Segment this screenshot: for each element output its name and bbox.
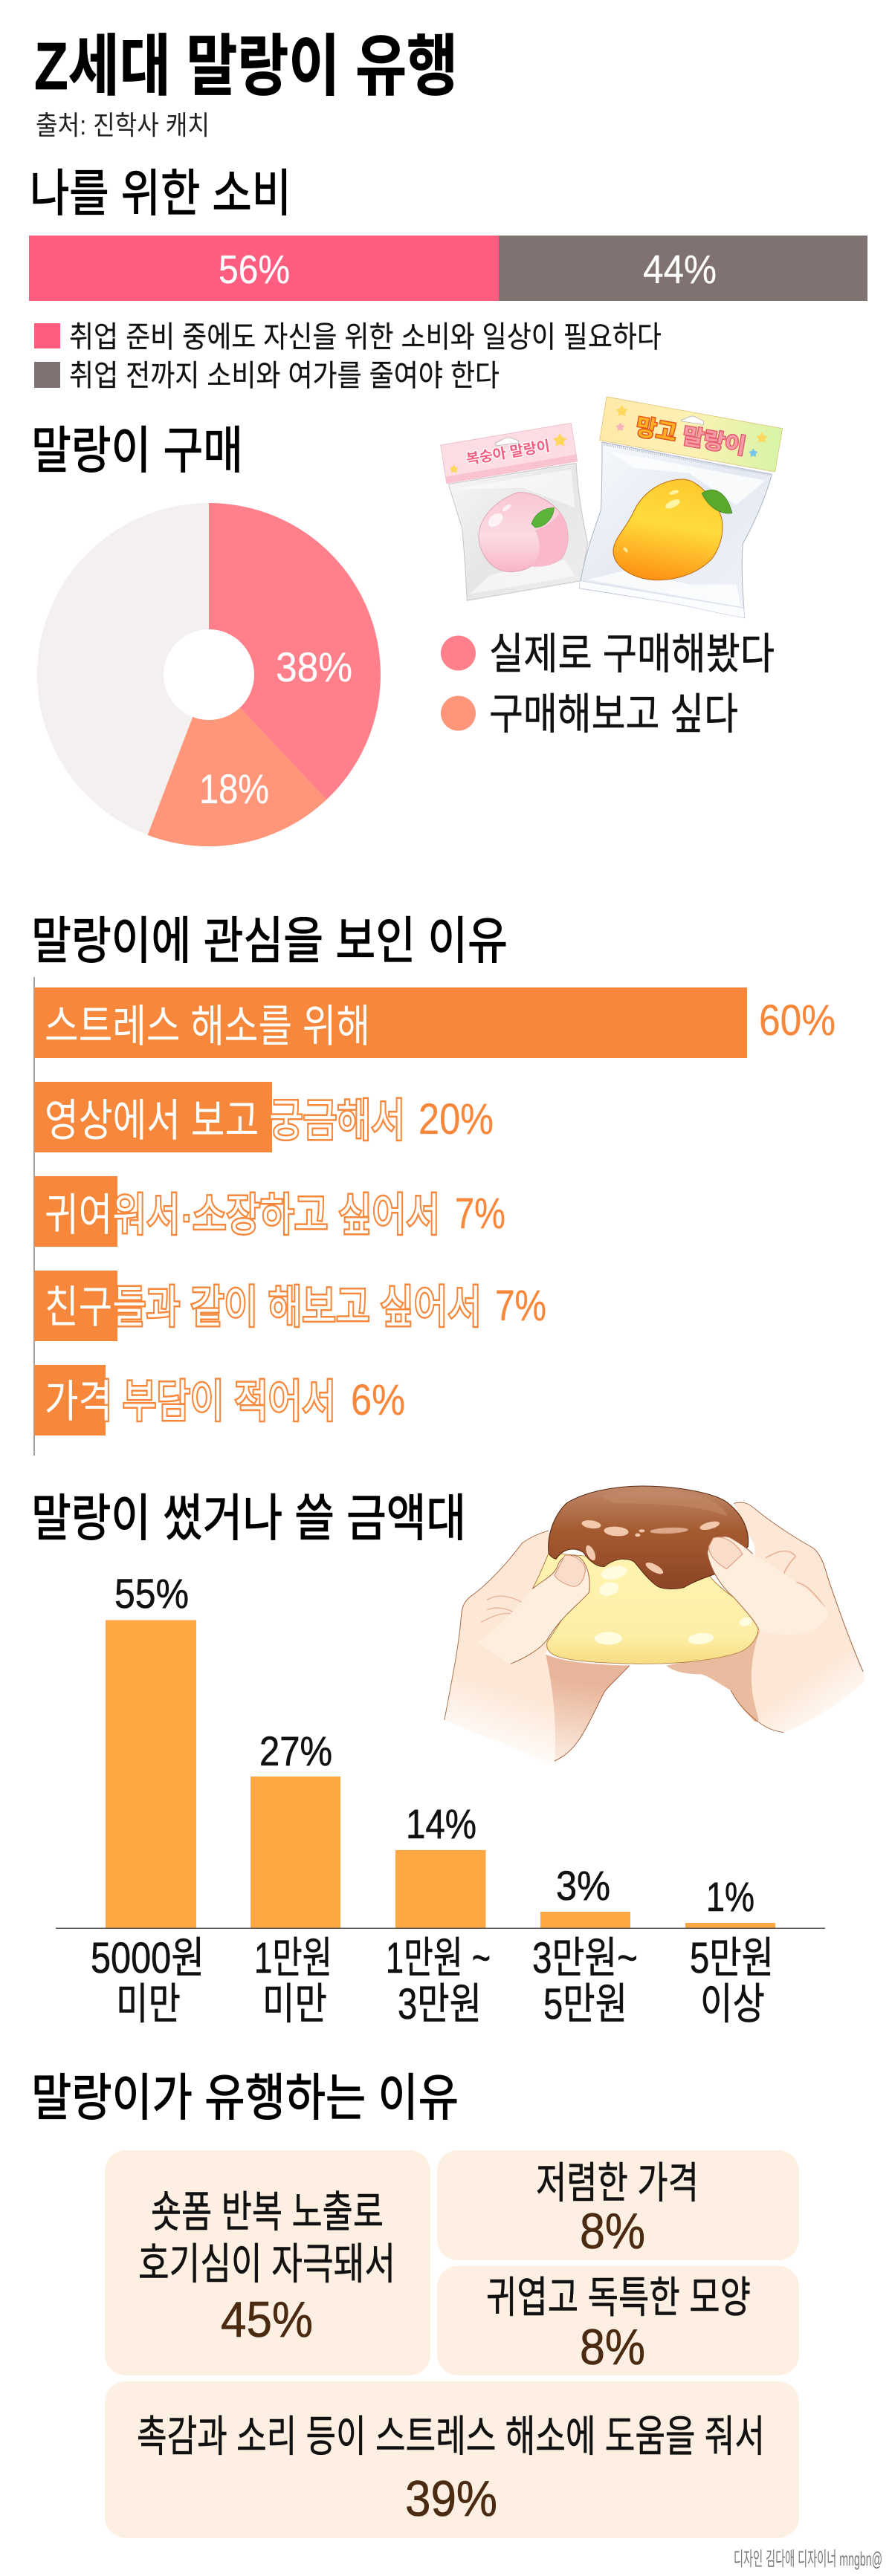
row 2: 영상에서 보고 궁금해서 xyxy=(45,1096,405,1146)
peach bag xyxy=(441,423,588,600)
card: low price 8% xyxy=(437,2150,799,2260)
left thumb xyxy=(478,1555,589,1664)
axis line xyxy=(34,977,35,1456)
heading: consumption: 나를 위한 소비 xyxy=(30,166,291,222)
panel: spending range xyxy=(31,1486,864,2028)
heading: why trending: 말랑이가 유행하는 이유 xyxy=(31,2070,459,2126)
card: cute shape 8%: 귀엽고 독특한 모양 xyxy=(486,2274,751,2322)
row 3: 귀여워서·소장하고 싶어서 xyxy=(45,1190,440,1240)
custard xyxy=(532,1553,759,1664)
card: touch and sound 39% xyxy=(105,2381,799,2538)
heading: reasons for interest: 말랑이에 관심을 보인 이유 xyxy=(31,913,508,970)
mango bag: 말랑이 xyxy=(680,424,748,459)
category labels: 미만 xyxy=(262,1980,327,2028)
card: short-form 45% xyxy=(105,2150,430,2375)
card: short-form 45%: 호기심이 자극돼서 xyxy=(138,2240,395,2288)
category labels: 5000원 xyxy=(91,1934,204,1982)
column chart xyxy=(56,1570,825,2028)
category labels: 3만원 xyxy=(398,1980,482,2028)
row 5: 가격 부담이 적어서 xyxy=(45,1377,336,1427)
value labels: 55% xyxy=(114,1570,189,1617)
value labels: 27% xyxy=(259,1727,332,1774)
title: Z세대 말랑이 유행 xyxy=(34,30,458,104)
mango bag xyxy=(579,397,783,618)
card: cute shape 8% xyxy=(437,2266,799,2375)
row 5: 6% xyxy=(351,1376,405,1424)
value labels xyxy=(114,1570,754,1920)
category labels xyxy=(91,1934,774,2028)
donut chart: 18% xyxy=(199,765,269,812)
category labels: 1만원 ~ xyxy=(386,1934,491,1982)
category labels: 5만원 xyxy=(690,1934,774,1982)
panel: squishy purchase xyxy=(31,397,783,846)
card: low price 8%: 8% xyxy=(580,2203,645,2259)
value labels: 1% xyxy=(706,1873,754,1920)
card: touch and sound 39%: 39% xyxy=(405,2470,497,2527)
panel: why squishies are trending xyxy=(31,2070,799,2538)
row 1: 스트레스 해소를 위해 xyxy=(45,1002,370,1051)
donut chart xyxy=(37,503,381,846)
card: short-form 45%: 45% xyxy=(221,2291,313,2348)
peach bag: 복숭아 말랑이 xyxy=(465,438,552,468)
category labels: 이상 xyxy=(700,1980,765,2028)
right thumb xyxy=(708,1537,828,1635)
card: cute shape 8%: 8% xyxy=(580,2319,645,2375)
value labels: 14% xyxy=(406,1800,476,1847)
category labels: 3만원~ xyxy=(532,1934,638,1982)
illustration: squishy toys in bags xyxy=(441,397,783,618)
row 2: 20% xyxy=(418,1095,494,1143)
row 4: 7% xyxy=(495,1282,546,1330)
stacked bar: 56 / 44: 56% xyxy=(219,247,290,292)
legend: pink: 취업 준비 중에도 자신을 위한 소비와 일상이 필요하다 xyxy=(69,321,662,354)
caramel xyxy=(549,1486,749,1589)
row 1: 60% xyxy=(759,996,836,1045)
panel: consumption for myself xyxy=(29,166,867,392)
card: short-form 45%: 숏폼 반복 노출로 xyxy=(151,2188,384,2236)
row 3: 7% xyxy=(455,1190,505,1238)
legend: gray: 취업 전까지 소비와 여가를 줄여야 한다 xyxy=(69,360,500,392)
panel: reasons for interest xyxy=(31,913,836,1456)
legend: want to buy: 구매해보고 싶다 xyxy=(489,690,738,739)
row 4: 친구들과 같이 해보고 싶어서 xyxy=(45,1282,482,1332)
card: low price 8%: 저렴한 가격 xyxy=(536,2159,699,2207)
stacked bar: 56 / 44: 44% xyxy=(643,247,717,292)
donut chart: 38% xyxy=(276,643,352,690)
value labels: 3% xyxy=(556,1862,610,1909)
heading: purchase: 말랑이 구매 xyxy=(31,423,243,479)
bars xyxy=(34,987,747,1435)
legend: bought: 실제로 구매해봤다 xyxy=(489,630,775,678)
mango bag: 망고 xyxy=(634,414,679,446)
category labels: 미만 xyxy=(116,1980,181,2028)
source line: 출처: 진학사 캐치 xyxy=(36,110,210,140)
stacked bar: 56 / 44 xyxy=(29,236,867,301)
heading: spending: 말랑이 썼거나 쓸 금액대 xyxy=(31,1490,466,1547)
illustration: hands squeezing pudding squishy xyxy=(445,1486,864,1765)
category labels: 5만원 xyxy=(543,1980,627,2028)
row 1 xyxy=(45,996,836,1051)
category labels: 1만원 xyxy=(254,1934,332,1982)
